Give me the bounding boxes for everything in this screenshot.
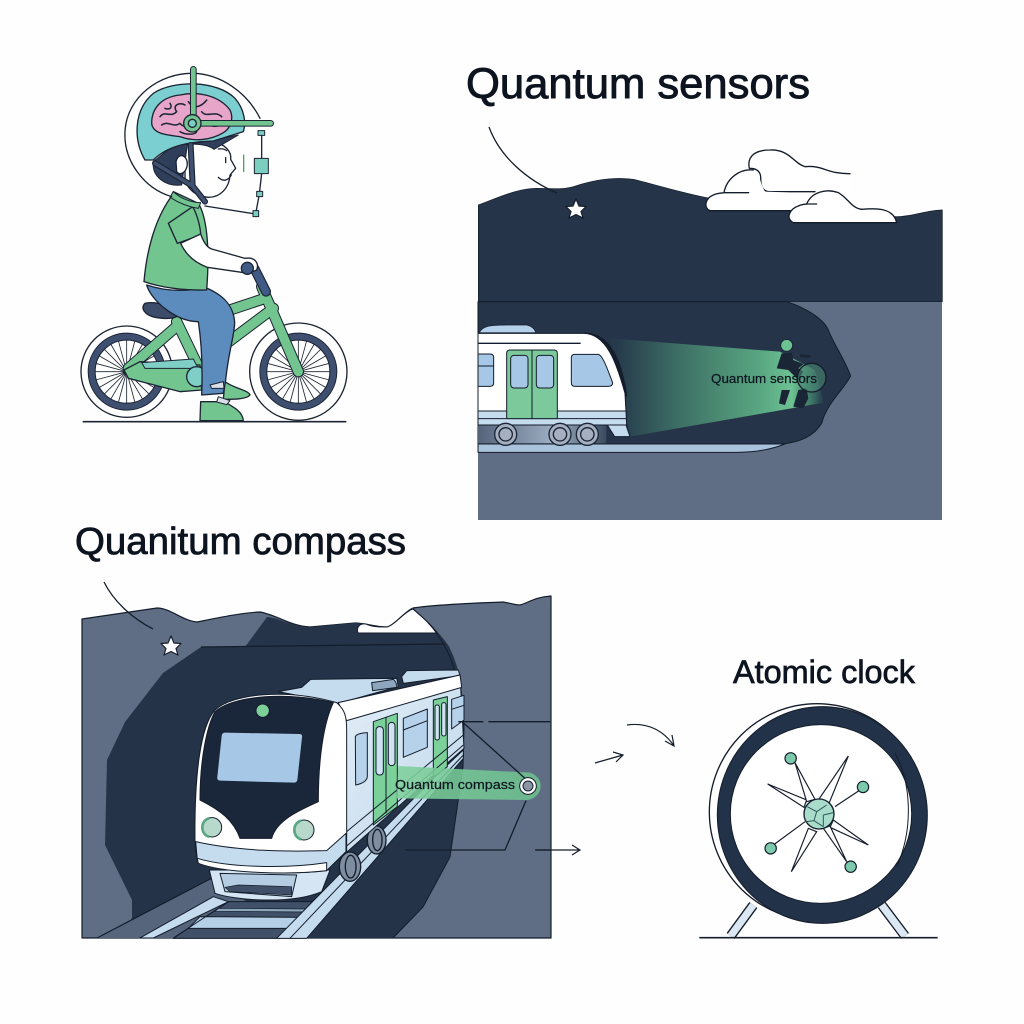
train bumper (196, 833, 346, 873)
sensor ring (797, 363, 826, 392)
sensor wires (205, 133, 262, 214)
rear ridge (245, 608, 450, 660)
train stripe (478, 411, 627, 425)
ground (97, 878, 300, 938)
tunnel scene (478, 302, 851, 452)
ear (176, 156, 187, 174)
helmet outline (125, 73, 260, 197)
near shoe (200, 402, 243, 421)
shirt (144, 192, 208, 290)
arch outline (393, 609, 464, 938)
train body (478, 333, 627, 425)
brain (152, 94, 232, 140)
train lower edge (327, 735, 463, 863)
arrow: curved pointer (627, 724, 674, 746)
figure silhouette (777, 339, 811, 408)
clock outer ring (709, 704, 925, 920)
icon: star (566, 199, 586, 218)
train skirt (607, 425, 630, 437)
panel: quantum sensors tunnel scene (478, 127, 942, 520)
bicycle frame (124, 268, 298, 392)
saddle (143, 303, 180, 319)
callout curve (489, 127, 557, 193)
compass connector lines (405, 722, 550, 850)
illustration: child on bicycle wearing brain helmet (81, 69, 347, 422)
icon: star (161, 636, 181, 655)
collar (170, 192, 201, 208)
handlebar grip (241, 262, 253, 274)
panel: quantum compass train scene (82, 582, 551, 938)
mountain (478, 178, 942, 302)
train and track (140, 670, 550, 938)
callout curve (104, 582, 153, 629)
label: Quantum sensors beam: Quantum sensors (711, 372, 817, 386)
train side windows (337, 695, 464, 792)
sensor beam (610, 338, 824, 437)
train shadow (583, 333, 627, 397)
pedal detail (210, 382, 230, 405)
train wheels (495, 423, 598, 445)
sensor nodes (253, 131, 268, 217)
train door (507, 350, 557, 419)
helmet shell (137, 84, 245, 160)
train roof band (338, 675, 462, 721)
head (185, 142, 236, 197)
jeans (147, 285, 235, 395)
arrow: small pointer (595, 752, 623, 763)
compass label band (397, 766, 541, 800)
tunnel dark (105, 644, 464, 938)
train wheels (339, 826, 386, 881)
snow patch (357, 609, 437, 633)
train windscreen (217, 733, 302, 783)
train face (200, 696, 333, 838)
far shoe (223, 382, 250, 399)
shirt sleeve (168, 207, 201, 243)
hair (153, 135, 238, 185)
small gauge mark (242, 155, 246, 172)
label: Quantum compass: Quantum compass (395, 777, 515, 792)
front wheel (250, 323, 347, 420)
rear wheel (81, 326, 172, 417)
ground (478, 301, 942, 520)
train front shell (195, 694, 347, 866)
clock stand (731, 905, 905, 936)
train lights (256, 704, 269, 717)
train roof unit (479, 325, 536, 333)
train windows (478, 354, 494, 386)
clock baseline (699, 935, 938, 940)
train undercarriage (478, 423, 606, 443)
clouds (706, 150, 897, 223)
atom nucleus (804, 799, 834, 829)
title: Quantum sensors: Quantum sensors (466, 60, 810, 108)
arrow: lower pointer (536, 845, 580, 855)
train lower front (209, 870, 330, 900)
rail (478, 444, 785, 452)
title: Atomic clock: Atomic clock (733, 654, 916, 690)
train side (327, 675, 464, 870)
clock dark ring (717, 707, 927, 923)
train doors (373, 713, 397, 825)
atom spokes (768, 756, 868, 872)
tunnel ceiling line (201, 644, 445, 647)
face features (218, 149, 231, 180)
clock face (730, 725, 912, 903)
track (140, 750, 463, 938)
ground line (83, 419, 346, 424)
helmet straps (155, 145, 205, 202)
rock wall (82, 596, 551, 938)
tunnel (478, 302, 851, 444)
title: Quanitum compass: Quanitum compass (75, 520, 406, 563)
compass sensor (520, 778, 536, 794)
train roof units (278, 670, 460, 703)
arm (181, 234, 257, 273)
illustration: atomic clock (699, 704, 938, 938)
atom electrons (765, 753, 869, 872)
sensor arms (184, 69, 271, 132)
